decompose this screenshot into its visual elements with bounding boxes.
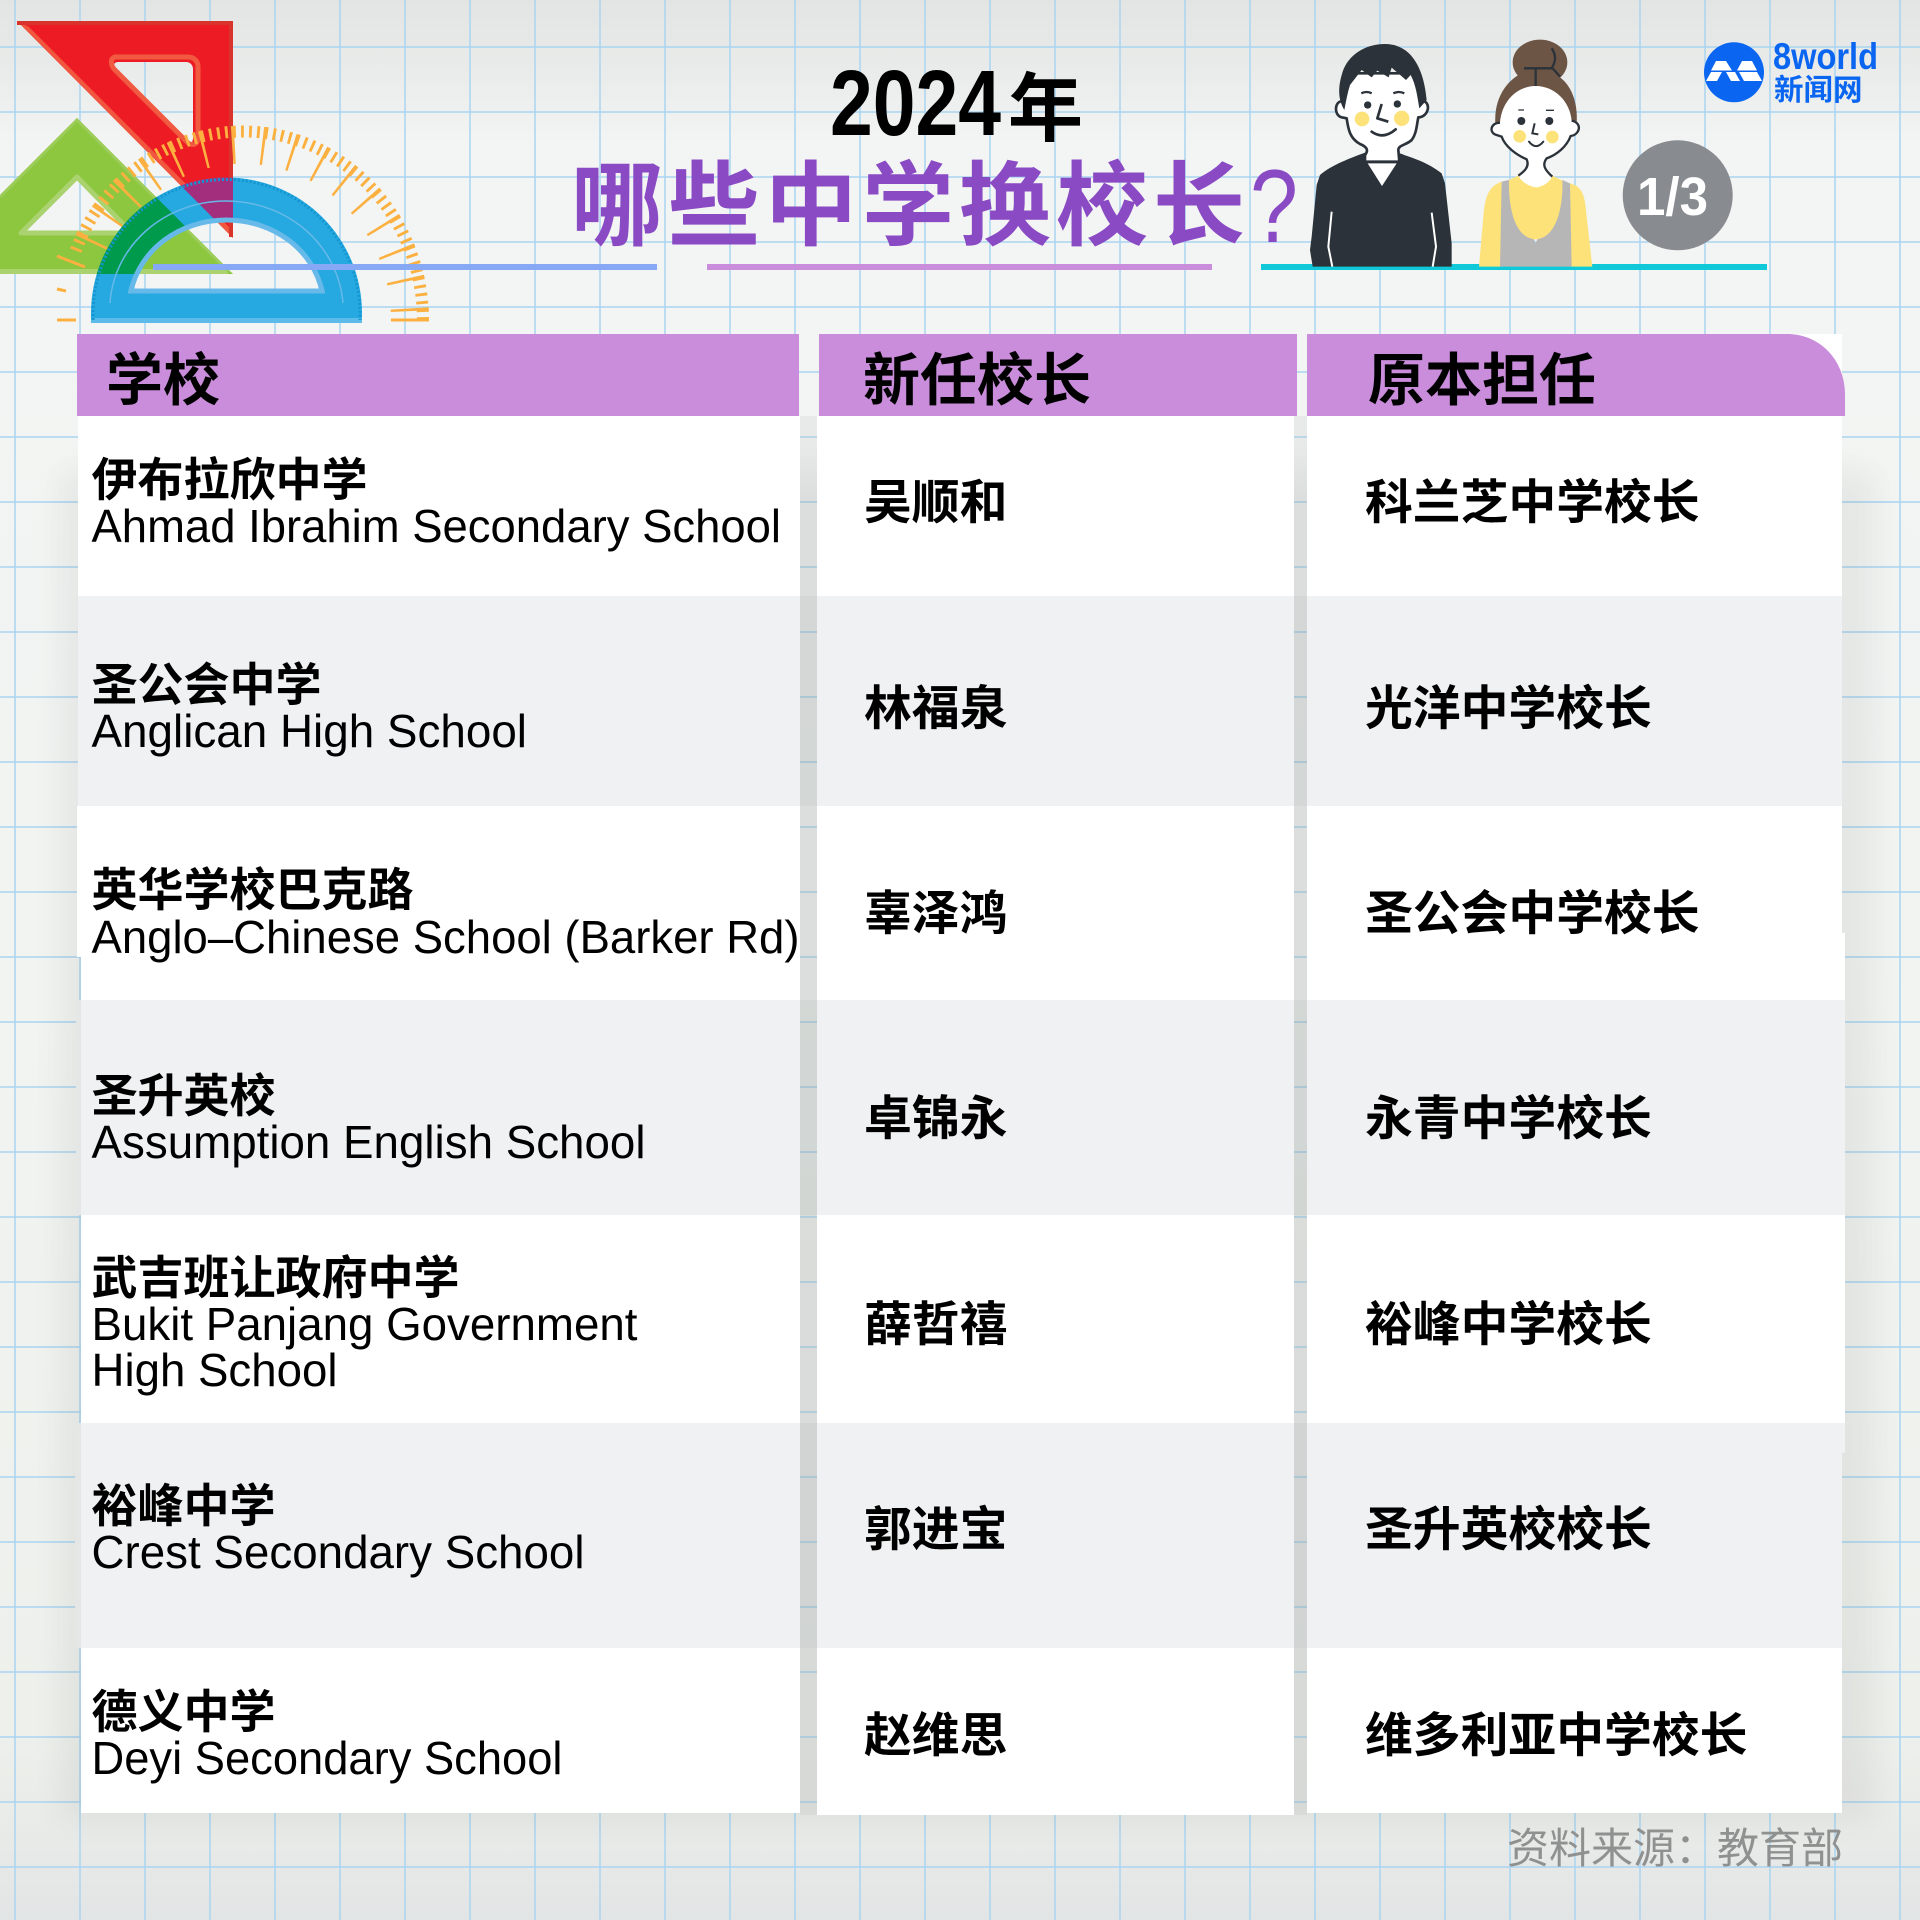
row 6: 裕峰中学: 圣升英校校长 — [1365, 1504, 1652, 1557]
header cell: 学校 — [77, 334, 799, 416]
header cell: 学校: 学校 — [106, 349, 220, 413]
row 3: 英华学校巴克路: 英华学校巴克路 — [92, 864, 414, 916]
icon: blue protractor — [91, 178, 362, 323]
row 7: 德义中学: 赵维思 — [864, 1710, 1007, 1763]
row 2: 圣公会中学: 圣公会中学 — [92, 659, 322, 711]
underline: teal segment — [1261, 264, 1767, 270]
row 1: 伊布拉欣中学: Ahmad Ibrahim Secondary School — [92, 500, 781, 552]
page badge: 1/3 — [1623, 140, 1733, 250]
title line: 哪些中学换校长?: ? — [1250, 149, 1298, 265]
icon: red set square — [17, 21, 233, 238]
row 4: 圣升英校: 永青中学校长 — [1365, 1093, 1652, 1146]
geometry set decoration: set squares and protractor — [0, 21, 429, 323]
table header row — [77, 334, 1845, 416]
row 5: 武吉班让政府中学: High School — [92, 1344, 338, 1396]
row 4: 圣升英校 — [76, 1000, 1845, 1215]
source note: 资料来源：教育部 — [1507, 1825, 1843, 1872]
row 5: 武吉班让政府中学 — [81, 1215, 1845, 1423]
row 2: 圣公会中学: Anglican High School — [92, 705, 527, 757]
title line: 哪些中学换校长?: 哪些中学换校长 — [571, 156, 1245, 258]
row 3: 英华学校巴克路: 辜泽鸿 — [864, 888, 1007, 941]
row 3: 英华学校巴克路: Anglo–Chinese School (Barker Rd) — [92, 911, 800, 963]
row 7: 德义中学: Deyi Secondary School — [92, 1732, 562, 1784]
row 5: 武吉班让政府中学: 薛哲禧 — [864, 1299, 1007, 1352]
row 5: 武吉班让政府中学: Bukit Panjang Government — [92, 1298, 638, 1350]
row 7: 德义中学 — [81, 1648, 1842, 1815]
title line: 2024年: 2024 — [830, 51, 1001, 155]
logo: 8world 新闻网: 新闻网 — [1774, 74, 1863, 107]
icon: male principal — [1310, 44, 1452, 267]
header cell: 新任校长: 新任校长 — [863, 349, 1091, 413]
row 1: 伊布拉欣中学 — [78, 416, 1842, 596]
row 6: 裕峰中学: 裕峰中学 — [92, 1480, 276, 1532]
row 2: 圣公会中学: 光洋中学校长 — [1365, 683, 1652, 736]
underline: blue segment — [153, 264, 657, 270]
row 6: 裕峰中学: 郭进宝 — [864, 1504, 1007, 1557]
row 3: 英华学校巴克路: 圣公会中学校长 — [1365, 888, 1700, 941]
icon: female principal — [1479, 40, 1592, 267]
row 4: 圣升英校: 圣升英校 — [92, 1070, 276, 1122]
row 3: 英华学校巴克路 — [77, 806, 1845, 1000]
row 6: 裕峰中学: Crest Secondary School — [92, 1526, 584, 1578]
logo: 8world 新闻网 — [1704, 36, 1878, 107]
header cell: 原本担任: 原本担任 — [1368, 349, 1596, 413]
row 1: 伊布拉欣中学: 吴顺和 — [864, 477, 1007, 530]
row 4: 圣升英校: Assumption English School — [92, 1116, 646, 1168]
row 7: 德义中学: 德义中学 — [92, 1686, 276, 1738]
header cell: 原本担任 — [1307, 334, 1845, 416]
row 2: 圣公会中学: 林福泉 — [864, 683, 1007, 736]
row 6: 裕峰中学 — [75, 1423, 1845, 1648]
title line: 2024年: 年 — [1008, 67, 1083, 151]
row 5: 武吉班让政府中学: 武吉班让政府中学 — [92, 1252, 460, 1304]
underline: purple segment — [707, 264, 1212, 270]
row 5: 武吉班让政府中学: 裕峰中学校长 — [1365, 1299, 1652, 1352]
page badge: 1/3: 1/3 — [1637, 167, 1708, 227]
icon: green set square — [0, 118, 233, 274]
icon: orange angle ticks — [57, 131, 429, 320]
row 1: 伊布拉欣中学: 伊布拉欣中学 — [92, 454, 368, 506]
row 1: 伊布拉欣中学: 科兰芝中学校长 — [1365, 477, 1700, 530]
row 4: 圣升英校: 卓锦永 — [864, 1093, 1007, 1146]
table column gaps shading — [800, 416, 1307, 1815]
row 7: 德义中学: 维多利亚中学校长 — [1365, 1710, 1747, 1763]
row 2: 圣公会中学 — [78, 596, 1842, 806]
table — [75, 334, 1845, 1815]
header cell: 新任校长 — [819, 334, 1297, 416]
logo: 8world 新闻网: 8world — [1773, 36, 1878, 77]
icon: logo roundel — [1704, 42, 1764, 102]
